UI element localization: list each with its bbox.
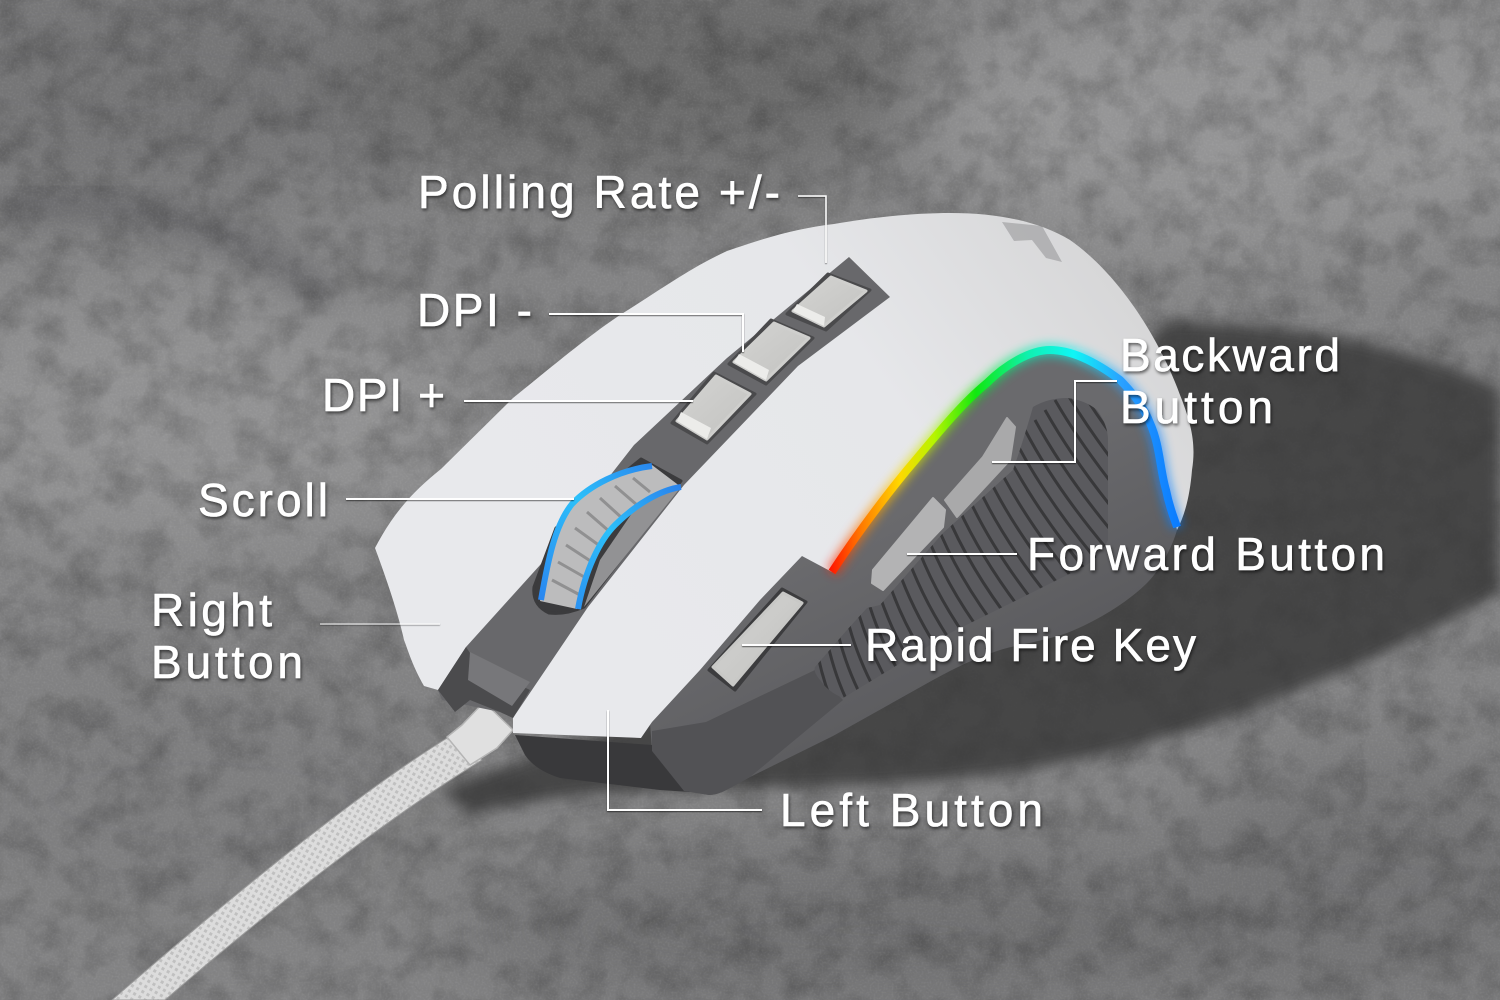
shadow of the mouse xyxy=(440,322,1500,815)
label: right button: Right xyxy=(151,584,272,636)
key: DPI plus xyxy=(672,373,755,443)
label: DPI minus xyxy=(417,284,743,352)
key: forward button xyxy=(872,498,945,590)
label: scroll: Scroll xyxy=(198,474,328,526)
key: DPI minus xyxy=(729,320,813,384)
label: left button xyxy=(608,710,1043,836)
label: rapid fire key: Rapid Fire Key xyxy=(865,619,1196,671)
mouse xyxy=(375,213,1209,795)
mouse white shell: right button, left button and rear xyxy=(375,213,1194,738)
mouse logo mark xyxy=(1002,222,1062,262)
front recess under strip xyxy=(438,647,530,718)
mouse dark front base xyxy=(515,735,690,792)
scroll wheel xyxy=(534,459,681,613)
RGB light strip xyxy=(832,350,1177,572)
mouse grey side shell xyxy=(650,350,1177,795)
key: rapid fire xyxy=(709,589,806,690)
label: right button xyxy=(151,584,440,688)
cable xyxy=(112,702,513,1000)
cable strain relief xyxy=(447,702,513,765)
key: polling rate xyxy=(787,274,870,330)
label: forward button: Forward Button xyxy=(1027,528,1385,580)
label: DPI plus: DPI + xyxy=(322,369,445,421)
label: DPI minus: DPI - xyxy=(417,284,532,336)
label: polling rate xyxy=(418,166,826,263)
label: backward button: Button xyxy=(1120,381,1273,433)
label: polling rate: Polling Rate +/- xyxy=(418,166,780,218)
center grey strip xyxy=(438,257,890,718)
blue wheel rings xyxy=(541,466,652,600)
grip patch xyxy=(815,398,1108,698)
label: left button: Left Button xyxy=(780,784,1043,836)
label: backward button xyxy=(992,329,1340,462)
key: backward button xyxy=(945,418,1015,517)
scroll hole xyxy=(534,459,681,613)
wheel tread xyxy=(540,465,681,609)
label: backward button: Backward xyxy=(1120,329,1340,381)
label: right button: Button xyxy=(151,636,303,688)
mouse lower side facet xyxy=(652,670,843,795)
